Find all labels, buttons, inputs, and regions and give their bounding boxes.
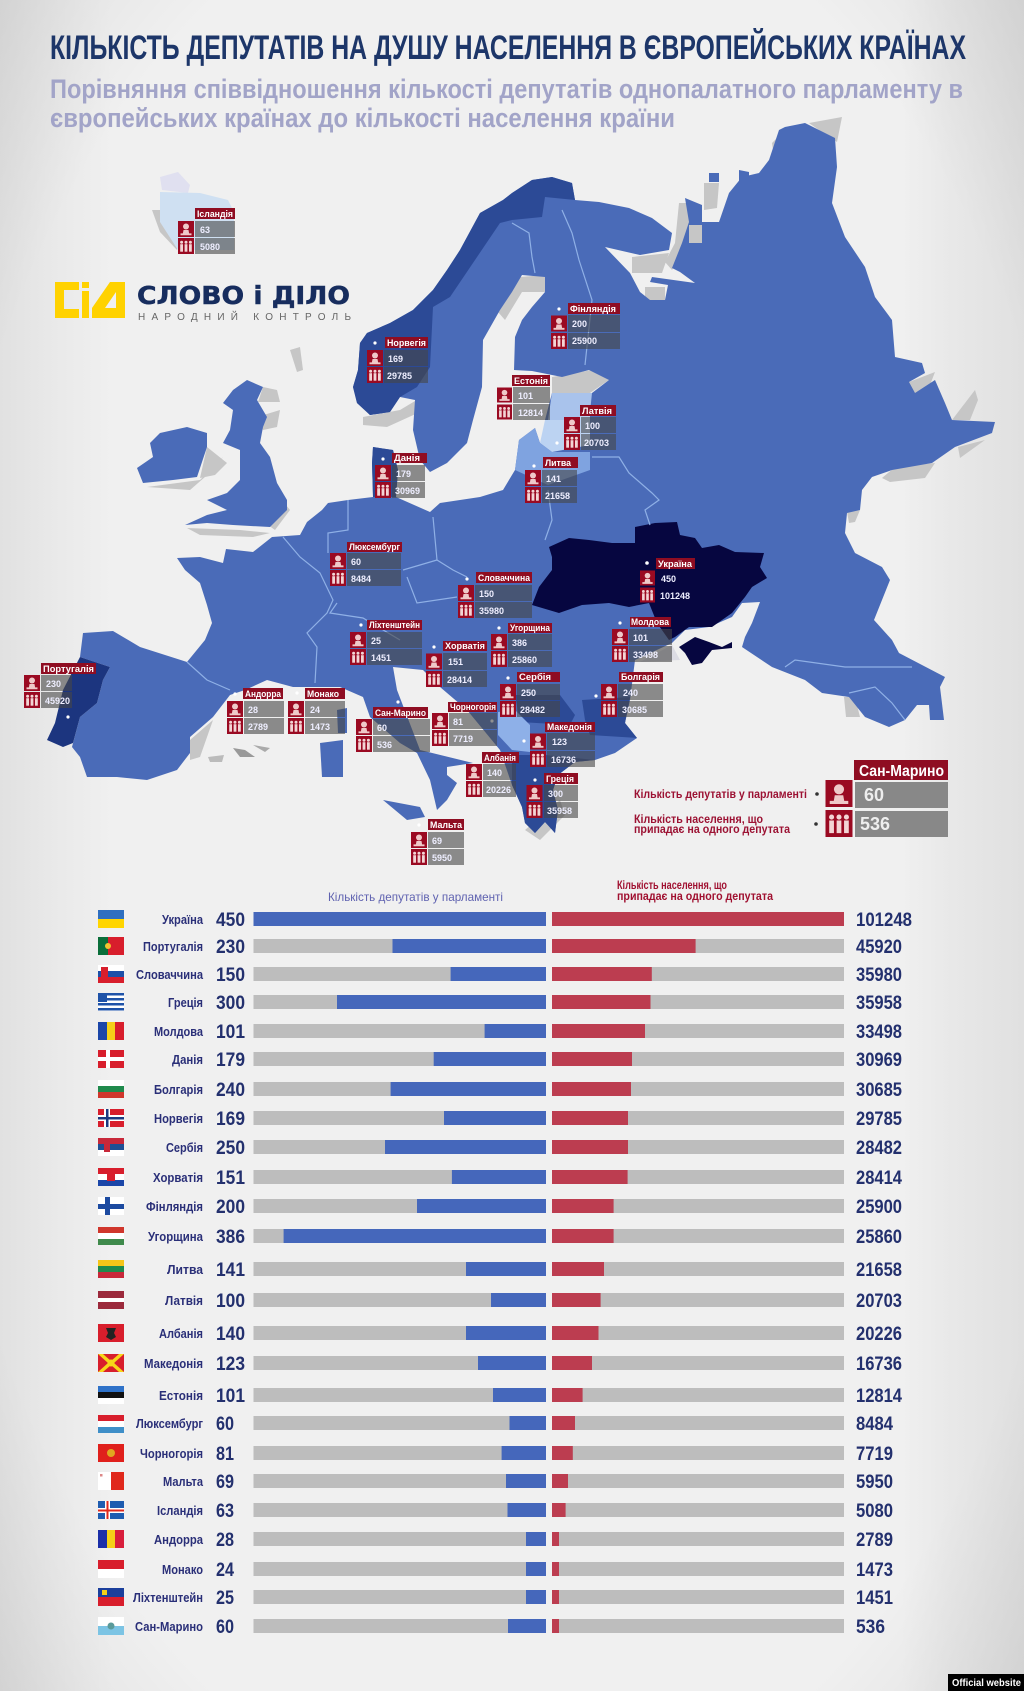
country: Denmark	[372, 447, 398, 497]
row: Албанія: 140	[216, 1324, 245, 1345]
label: Албанія: Албанія	[484, 753, 516, 763]
label: Албанія: 140	[487, 768, 502, 778]
row: Чорногорія	[98, 1444, 893, 1465]
label: Фінляндія: Фінляндія	[570, 304, 616, 314]
row: Ліхтенштейн: 1451	[856, 1588, 893, 1609]
label: Латвія	[555, 405, 616, 450]
row: Україна: 450	[216, 910, 245, 931]
label: Андорра: Андорра	[245, 689, 282, 699]
row: Болгарія: Болгарія	[154, 1082, 203, 1097]
label: Латвія: Латвія	[582, 406, 612, 416]
label: Монако: 24	[310, 705, 320, 715]
row: Сан-Марино: 536	[856, 1617, 885, 1638]
Islands: Corsica, Sardinia, Sicily	[320, 170, 749, 820]
label: Чорногорія: Чорногорія	[450, 702, 496, 712]
country: Norway	[353, 177, 575, 415]
official website badge	[948, 1674, 1024, 1691]
row: Чорногорія: Чорногорія	[140, 1446, 203, 1461]
legend text: population	[634, 814, 791, 836]
Ireland	[137, 427, 207, 483]
label: Молдова: Молдова	[631, 617, 670, 627]
row: Андорра: Андорра	[154, 1532, 204, 1547]
row: Норвегія: Норвегія	[154, 1111, 203, 1126]
label: Фінляндія	[551, 303, 620, 349]
label: Естонія: 101	[518, 391, 533, 401]
row: Литва	[98, 1260, 902, 1281]
label: Люксембург: 60	[351, 557, 361, 567]
label: Мальта: 5950	[432, 853, 452, 863]
label: Ісландія	[178, 208, 235, 254]
label: Ісландія: 5080	[200, 242, 220, 252]
label: Фінляндія: 25900	[572, 336, 597, 346]
label: Хорватія: 28414	[447, 675, 472, 685]
row: Португалія: Португалія	[143, 939, 203, 954]
label: Ліхтенштейн: 1451	[371, 653, 391, 663]
label: Андорра	[227, 688, 284, 734]
label: Норвегія: 169	[388, 354, 403, 364]
row: Молдова: 33498	[856, 1022, 902, 1043]
label: Албанія	[466, 752, 519, 797]
label: Греція: 35958	[547, 806, 572, 816]
row: Чорногорія: 81	[216, 1444, 234, 1465]
row: Молдова	[98, 1022, 902, 1043]
row: Латвія	[98, 1291, 902, 1312]
label: Ліхтенштейн: 25	[371, 636, 381, 646]
row: Ліхтенштейн	[98, 1588, 893, 1609]
row: Сербія: Сербія	[166, 1140, 203, 1155]
label: Ліхтенштейн: Ліхтенштейн	[369, 620, 420, 630]
row: Україна: Україна	[162, 912, 204, 927]
row: Данія: 30969	[856, 1050, 902, 1071]
row: Україна: 101248	[856, 910, 912, 931]
row: Сербія	[98, 1138, 902, 1159]
row: Албанія: Албанія	[159, 1326, 203, 1341]
row: Литва: Литва	[167, 1262, 204, 1277]
label: Хорватія: 151	[448, 657, 463, 667]
row: Естонія: 12814	[856, 1386, 902, 1407]
label: Мальта: Мальта	[430, 820, 463, 830]
label: Словаччина	[458, 572, 532, 618]
gray patches on land near Kanin	[689, 225, 702, 243]
row: Монако: Монако	[162, 1562, 203, 1577]
label: Україна: 101248	[660, 591, 690, 601]
label: Люксембург: 8484	[351, 574, 371, 584]
row: Словаччина	[98, 965, 902, 986]
label: Литва: 21658	[545, 491, 570, 501]
label: Данія: Данія	[394, 453, 420, 463]
label: Молдова	[612, 617, 672, 662]
label: Болгарія	[594, 672, 663, 717]
row: Болгарія: 30685	[856, 1080, 902, 1101]
row: Португалія	[98, 937, 902, 958]
label: Угорщина: 386	[512, 638, 527, 648]
label: Македонія: 16736	[551, 755, 576, 765]
label: Молдова: 33498	[633, 650, 658, 660]
label: Чорногорія	[432, 702, 497, 746]
label: Ліхтенштейн	[350, 620, 422, 665]
row: Андорра	[98, 1530, 893, 1551]
legend	[634, 760, 948, 837]
row: Ісландія: 63	[216, 1501, 234, 1522]
label: Македонія: Македонія	[547, 722, 592, 732]
bar chart	[98, 910, 912, 1638]
row: Португалія: 230	[216, 937, 245, 958]
row: Естонія: 101	[216, 1386, 245, 1407]
label: Україна	[640, 558, 695, 602]
row: Угорщина: 25860	[856, 1227, 902, 1248]
label: Естонія	[497, 375, 550, 420]
label: Сербія: 250	[521, 688, 536, 698]
row: Македонія: 16736	[856, 1354, 902, 1375]
row: Данія	[98, 1050, 902, 1071]
label: Сан-Марино	[356, 700, 430, 752]
label: Македонія: 123	[552, 737, 567, 747]
row: Угорщина: Угорщина	[148, 1229, 204, 1244]
row: Латвія: Латвія	[165, 1293, 203, 1308]
row: Естонія: Естонія	[159, 1388, 203, 1403]
row: Албанія	[98, 1324, 902, 1345]
row: Словаччина: 35980	[856, 965, 902, 986]
country: Greece	[512, 755, 595, 833]
label: Монако: 1473	[310, 722, 330, 732]
row: Монако: 24	[216, 1560, 234, 1581]
label: Греція: 300	[548, 789, 563, 799]
row: Болгарія: 240	[216, 1080, 245, 1101]
row: Естонія	[98, 1386, 902, 1407]
row: Данія: 179	[216, 1050, 245, 1071]
row: Україна	[98, 910, 912, 931]
row: Фінляндія	[98, 1197, 902, 1218]
row: Фінляндія: Фінляндія	[146, 1199, 203, 1214]
label: Болгарія: 240	[623, 688, 638, 698]
row: Латвія: 20703	[856, 1291, 902, 1312]
row: Чорногорія: 7719	[856, 1444, 893, 1465]
row: Андорра: 28	[216, 1530, 234, 1551]
label: Португалія: 45920	[45, 696, 70, 706]
row: Сан-Марино: 60	[216, 1617, 234, 1638]
label: Сербія	[500, 672, 560, 717]
row: Молдова: Молдова	[154, 1024, 204, 1039]
row: Люксембург: Люксембург	[136, 1416, 203, 1431]
row: Монако: 1473	[856, 1560, 893, 1581]
label: Сербія: 28482	[520, 705, 545, 715]
row: Фінляндія: 25900	[856, 1197, 902, 1218]
row: Ліхтенштейн: 25	[216, 1588, 234, 1609]
label: Чорногорія: 81	[453, 717, 463, 727]
country: Macedonia Albania	[498, 710, 530, 752]
label: Литва: Литва	[545, 458, 572, 468]
label: Мальта	[411, 819, 464, 865]
row: Люксембург: 60	[216, 1414, 234, 1435]
label: Україна: 450	[661, 574, 676, 584]
row: Хорватія: Хорватія	[153, 1170, 203, 1185]
logo tagline: НАРОДНИЙ КОНТРОЛЬ	[138, 310, 351, 323]
Great Britain	[185, 380, 287, 527]
label: Литва	[525, 457, 578, 503]
row: Хорватія: 151	[216, 1168, 245, 1189]
label: Сан-Марино: 536	[377, 740, 392, 750]
main landmass	[72, 123, 995, 833]
country: Bulgaria Serbia	[515, 695, 637, 738]
row: Греція: 300	[216, 993, 245, 1014]
row: Сербія: 28482	[856, 1138, 902, 1159]
row: Сан-Марино	[98, 1617, 885, 1638]
row: Ліхтенштейн: Ліхтенштейн	[133, 1590, 203, 1605]
label: Норвегія: Норвегія	[387, 338, 426, 348]
legend text: deputies: Кількість депутатів у парламенті	[634, 789, 807, 801]
label: Сан-Марино: 60	[377, 723, 387, 733]
label: Словаччина: 150	[479, 589, 494, 599]
logo mark	[55, 282, 125, 318]
row: Ісландія	[98, 1501, 893, 1522]
legend text: population: припадає на одного депутата	[634, 824, 791, 836]
borders	[187, 210, 912, 720]
row: Греція: Греція	[168, 995, 203, 1010]
label: Словаччина: Словаччина	[478, 573, 531, 583]
legend label box: 60	[864, 785, 884, 805]
row: Хорватія	[98, 1168, 902, 1189]
label: Чорногорія: 7719	[453, 734, 473, 744]
label: Україна: Україна	[658, 559, 693, 569]
row: Сан-Марино: Сан-Марино	[135, 1619, 203, 1634]
row: Молдова: 101	[216, 1022, 245, 1043]
legend label box	[826, 760, 948, 837]
row: Словаччина: Словаччина	[136, 967, 204, 982]
label: Угорщина: 25860	[512, 655, 537, 665]
row: Мальта	[98, 1472, 893, 1493]
label: Мальта: 69	[432, 836, 442, 846]
label: Андорра: 2789	[248, 722, 268, 732]
Iceland	[160, 172, 234, 250]
label: Португалія	[24, 663, 96, 719]
label: Естонія: 12814	[518, 408, 543, 418]
label: Греція: Греція	[546, 774, 574, 784]
row: Сербія: 250	[216, 1138, 245, 1159]
map of Europe	[47, 117, 995, 840]
subtitle: європейських країнах до кількості населення країни	[50, 103, 675, 133]
row: Андорра: 2789	[856, 1530, 893, 1551]
label: Латвія: 100	[585, 421, 600, 431]
row: Греція	[98, 993, 902, 1014]
label: Естонія: Естонія	[514, 376, 548, 386]
row: Мальта: 5950	[856, 1472, 893, 1493]
label: Греція	[526, 773, 578, 818]
label: Монако	[288, 688, 345, 734]
row: Монако	[98, 1560, 893, 1581]
label: Португалія: Португалія	[43, 664, 94, 674]
label: Угорщина	[491, 623, 552, 667]
row: Македонія: Македонія	[144, 1356, 203, 1371]
row: Македонія: 123	[216, 1354, 245, 1375]
chart header: population	[617, 880, 774, 903]
legend label box: Сан-Марино	[859, 763, 944, 780]
label: Данія: 30969	[395, 486, 420, 496]
label: Фінляндія: 200	[572, 319, 587, 329]
country: Estonia Latvia Lithuania	[515, 393, 592, 485]
label: Сан-Марино: Сан-Марино	[375, 708, 426, 718]
label: Ісландія: 63	[200, 225, 210, 235]
chart header: deputies: Кількість депутатів у парламенті	[328, 890, 503, 904]
label: Люксембург: Люксембург	[349, 542, 400, 552]
row: Угорщина: 386	[216, 1227, 245, 1248]
label: Люксембург	[330, 542, 402, 586]
row: Литва: 141	[216, 1260, 245, 1281]
label: Португалія: 230	[46, 679, 61, 689]
row: Литва: 21658	[856, 1260, 902, 1281]
row: Норвегія	[98, 1109, 902, 1130]
label: Сербія: Сербія	[519, 672, 551, 682]
chart header: population: Кількість населення, що	[617, 880, 727, 892]
label: Литва: 141	[546, 474, 561, 484]
label: Угорщина: Угорщина	[510, 623, 551, 633]
label: Хорватія: Хорватія	[445, 641, 485, 651]
sea shadows	[147, 117, 985, 840]
row: Словаччина: 150	[216, 965, 245, 986]
row: Угорщина	[98, 1227, 902, 1248]
label: Данія	[375, 453, 427, 498]
row: Ісландія: 5080	[856, 1501, 893, 1522]
row: Ісландія: Ісландія	[157, 1503, 203, 1518]
label: Словаччина: 35980	[479, 606, 504, 616]
label: Болгарія: Болгарія	[621, 672, 660, 682]
label: Албанія: 20226	[486, 785, 511, 795]
label: Молдова: 101	[633, 633, 648, 643]
country: Crimea	[679, 637, 732, 665]
row: Португалія: 45920	[856, 937, 902, 958]
country: Portugal	[47, 657, 110, 747]
label: Болгарія: 30685	[622, 705, 647, 715]
chart header: population: припадає на одного депутата	[617, 891, 774, 903]
row: Греція: 35958	[856, 993, 902, 1014]
label: Норвегія: 29785	[387, 371, 412, 381]
subtitle	[50, 74, 963, 133]
label: Ісландія: Ісландія	[197, 209, 233, 219]
row: Хорватія: 28414	[856, 1168, 902, 1189]
row: Мальта: Мальта	[163, 1474, 204, 1489]
country: Ukraine	[532, 522, 767, 640]
row: Норвегія: 29785	[856, 1109, 902, 1130]
row: Люксембург	[98, 1414, 893, 1435]
row: Данія: Данія	[172, 1052, 203, 1067]
row: Болгарія	[98, 1080, 902, 1101]
legend text: population: Кількість населення, що	[634, 814, 763, 826]
row: Мальта: 69	[216, 1472, 234, 1493]
row: Латвія: 100	[216, 1291, 245, 1312]
legend label box: 536	[860, 814, 890, 834]
logo	[55, 281, 350, 318]
row: Македонія	[98, 1354, 902, 1375]
row: Люксембург: 8484	[856, 1414, 893, 1435]
row: Фінляндія: 200	[216, 1197, 245, 1218]
label: Монако: Монако	[307, 689, 339, 699]
row: Норвегія: 169	[216, 1109, 245, 1130]
label: Хорватія	[426, 641, 487, 687]
label: Андорра: 28	[248, 705, 258, 715]
label: Норвегія	[367, 337, 428, 383]
label: Македонія	[522, 722, 595, 767]
label: Латвія: 20703	[584, 438, 609, 448]
row: Албанія: 20226	[856, 1324, 902, 1345]
label: Данія: 179	[396, 469, 411, 479]
logo name: СЛОВО і ДІЛО	[137, 281, 350, 310]
